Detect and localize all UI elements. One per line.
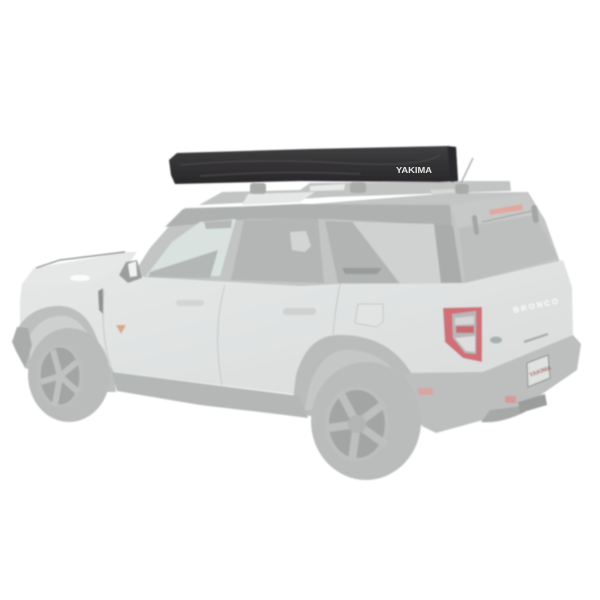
front bumper <box>12 327 32 368</box>
license plate <box>527 355 553 387</box>
door window <box>231 219 324 283</box>
taillight <box>443 307 482 362</box>
door handles <box>176 300 204 306</box>
antenna <box>461 158 473 183</box>
cabin and glass <box>128 192 560 290</box>
vehicle <box>12 158 581 480</box>
hood <box>22 252 134 284</box>
awning bag <box>169 146 458 184</box>
roof spoiler light <box>489 204 523 215</box>
windshield <box>146 219 236 276</box>
fuel door <box>355 304 383 327</box>
front wheel <box>28 328 110 422</box>
door seams <box>103 284 340 385</box>
badge <box>116 325 126 334</box>
rear bumper <box>403 335 581 433</box>
wheel arches <box>16 306 425 425</box>
rear badge text <box>490 296 561 344</box>
mirror <box>119 260 142 283</box>
rear side window <box>353 222 441 283</box>
fender vent <box>98 288 103 314</box>
rocker panel <box>112 372 308 418</box>
roof rack <box>199 181 511 205</box>
brand logo: YAKIMA <box>396 166 432 175</box>
body <box>20 252 573 395</box>
rear badge text: BRONCO <box>513 296 561 315</box>
rack towers <box>250 182 469 194</box>
license plate: YAKIMA <box>529 365 553 379</box>
rear wheel <box>311 362 421 480</box>
